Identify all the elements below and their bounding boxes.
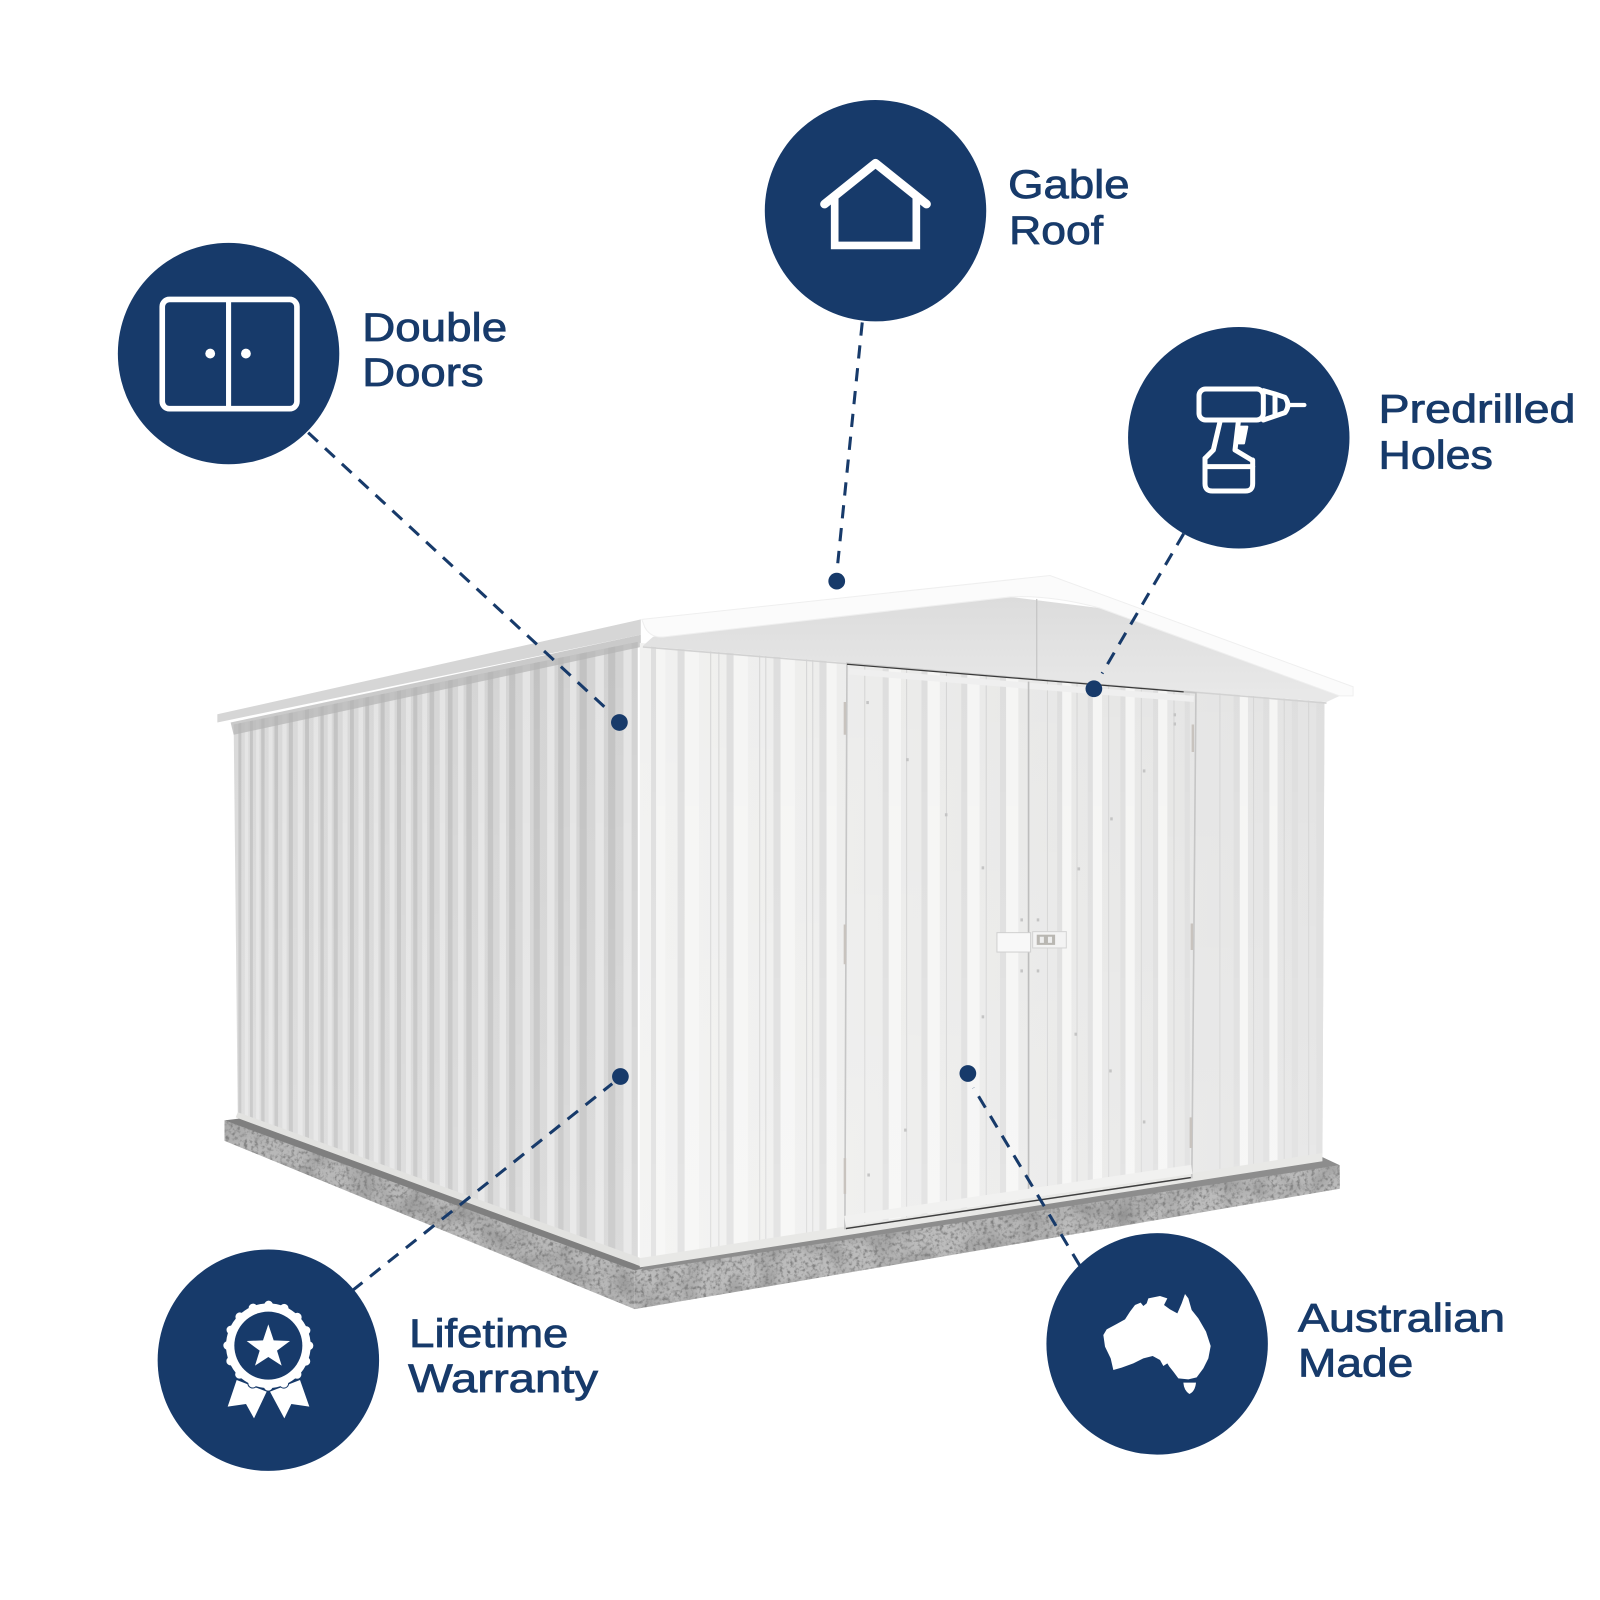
label xyxy=(1379,386,1576,477)
left wall base trim xyxy=(236,1112,641,1266)
callout: australian made xyxy=(1046,1233,1505,1455)
callout: lifetime warranty xyxy=(158,1249,599,1471)
label: Doors xyxy=(362,350,484,395)
leader line: predrilled holes xyxy=(1102,534,1184,673)
door hinges xyxy=(845,702,1193,1194)
marker dot: double doors xyxy=(611,714,628,731)
gable roof xyxy=(642,576,1353,696)
icon: house xyxy=(824,163,927,245)
label xyxy=(362,305,507,395)
badge circle xyxy=(158,1249,379,1471)
shed illustration xyxy=(217,576,1353,1327)
label: Gable xyxy=(1008,162,1130,207)
callout: gable roof xyxy=(765,100,1130,321)
marker dot: lifetime warranty xyxy=(612,1068,629,1085)
label: Made xyxy=(1298,1341,1413,1386)
icon: cordless drill xyxy=(1199,389,1304,491)
label: Double xyxy=(362,305,507,350)
leader line: gable roof xyxy=(838,322,862,563)
label xyxy=(408,1311,599,1401)
leader line: lifetime warranty xyxy=(352,1084,612,1291)
callout: predrilled holes xyxy=(1128,327,1576,548)
marker dot: predrilled holes xyxy=(1086,680,1102,697)
front wall xyxy=(640,643,1324,1268)
double door frame xyxy=(845,663,1196,1229)
leader line: australian made xyxy=(973,1088,1080,1265)
label: Predrilled xyxy=(1379,386,1576,431)
badge circle xyxy=(118,243,339,464)
front wall base trim xyxy=(640,1153,1322,1267)
left side wall xyxy=(230,634,641,1266)
label: Lifetime xyxy=(409,1311,568,1356)
left roof fascia xyxy=(217,619,641,722)
label xyxy=(1008,162,1130,253)
label: Roof xyxy=(1009,208,1104,253)
badge circle xyxy=(765,100,986,321)
marker dot: gable roof xyxy=(828,573,845,589)
door screws xyxy=(866,701,1176,1177)
label: Australian xyxy=(1298,1296,1505,1341)
marker dot: australian made xyxy=(959,1065,976,1082)
leader line: double doors xyxy=(308,433,610,712)
eave shadow xyxy=(231,635,641,735)
label: Holes xyxy=(1379,432,1493,477)
icon: double doors xyxy=(162,299,297,409)
concrete slab xyxy=(224,1118,1340,1309)
badge circle xyxy=(1046,1233,1268,1455)
badge circle xyxy=(1128,327,1349,548)
icon: award rosette xyxy=(225,1302,312,1418)
label: Warranty xyxy=(408,1356,599,1401)
door latch xyxy=(997,932,1066,952)
callout: double doors xyxy=(118,243,507,464)
gable infill xyxy=(643,597,1340,703)
label xyxy=(1298,1296,1505,1386)
icon: map of Australia xyxy=(1103,1294,1211,1394)
